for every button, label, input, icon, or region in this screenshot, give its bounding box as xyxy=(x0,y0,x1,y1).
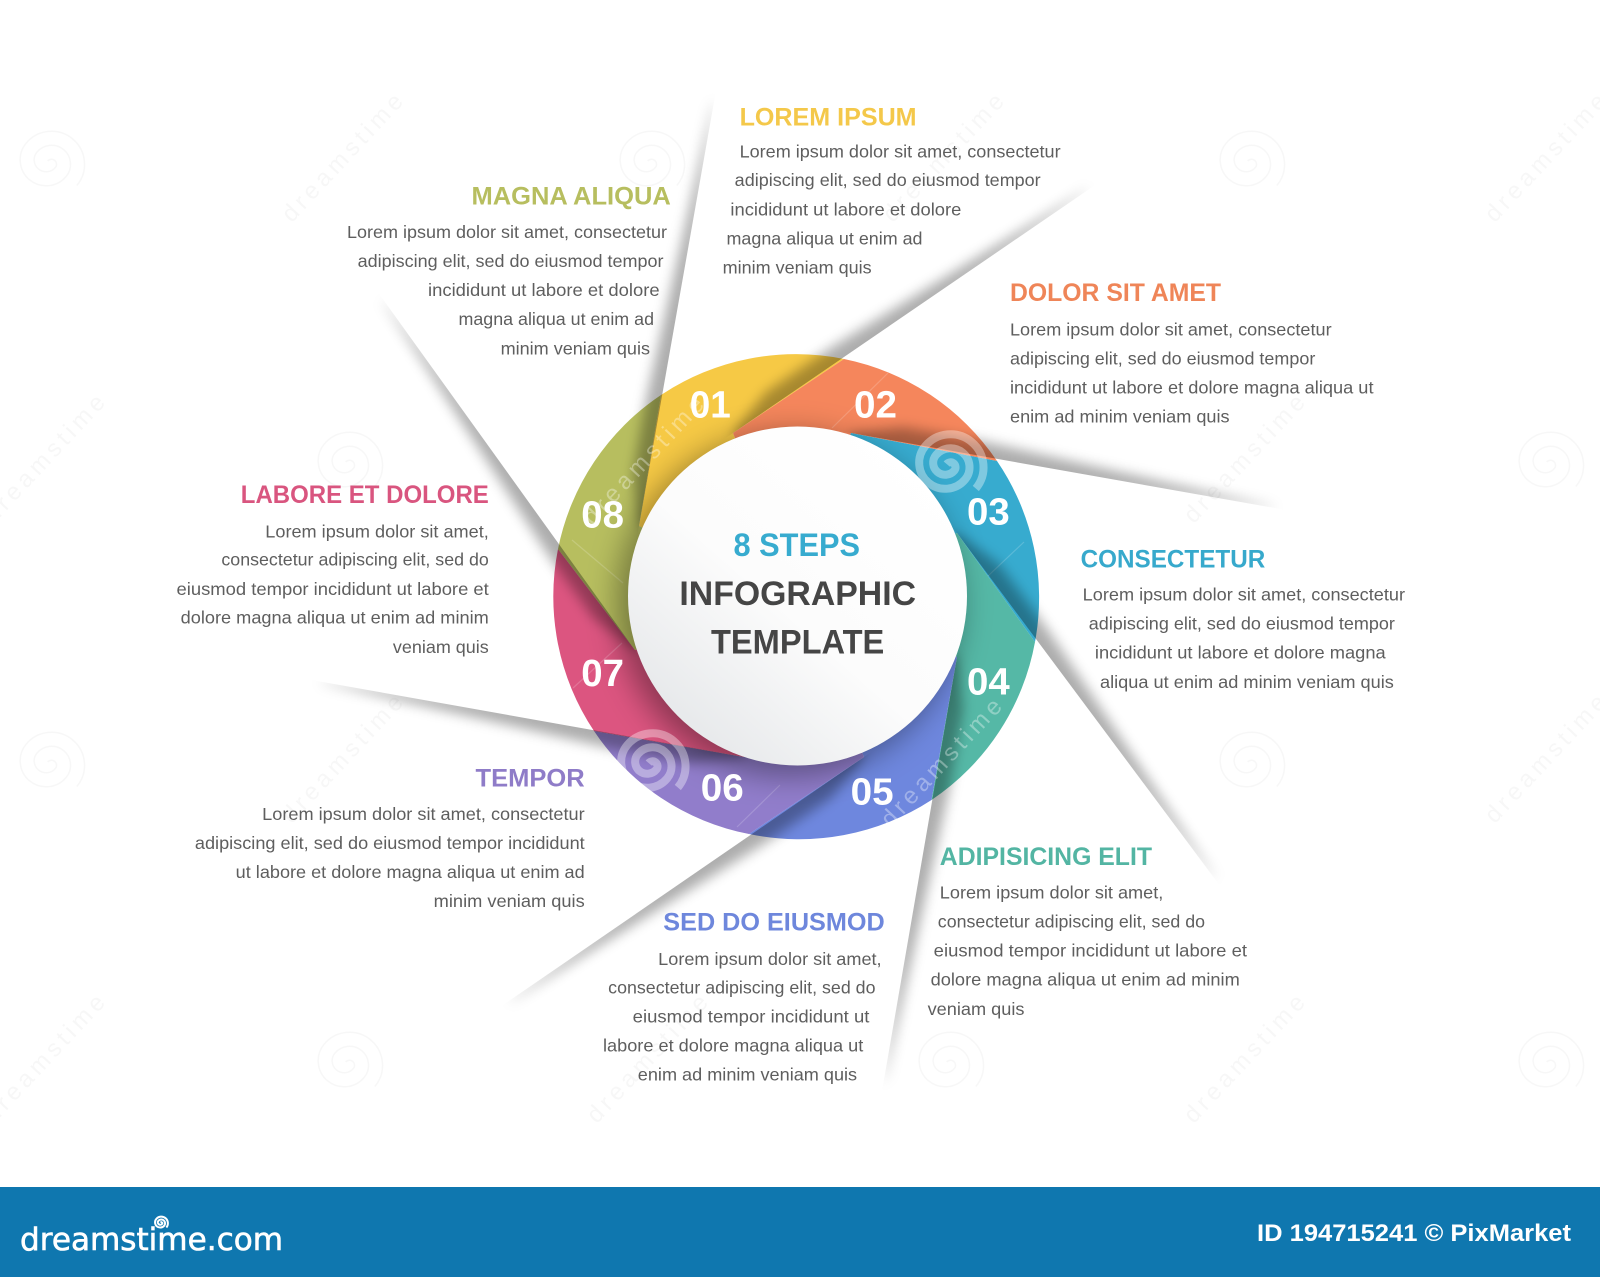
disc shadow limited to the ring xyxy=(617,432,961,776)
step numbers: 06 xyxy=(701,768,744,810)
segment 02 orange xyxy=(733,359,997,596)
text block: Tempor: Lorem ipsum dolor sit amet, consectetur xyxy=(262,804,585,824)
text block: Sed Do Eiusmod xyxy=(603,908,885,1085)
footer logo spiral xyxy=(153,1214,171,1231)
text block: Labore Et Dolore: eiusmod tempor incididunt ut labore et xyxy=(176,579,489,599)
segment 03 blue xyxy=(797,433,1039,642)
ring of eight coloured segments xyxy=(553,354,1039,839)
watermark overlay on ring: dreamstime xyxy=(577,391,710,530)
text block: Lorem Ipsum: Lorem ipsum dolor sit amet, consectetur xyxy=(740,142,1061,162)
shadow spoke 7 xyxy=(318,666,747,772)
shadow spoke 5 xyxy=(868,654,972,1083)
shadow spoke 1 xyxy=(624,100,730,529)
text block: Consectetur: Lorem ipsum dolor sit amet, consectetur xyxy=(1083,585,1405,605)
footer band xyxy=(0,1187,1600,1277)
text block: Labore Et Dolore: veniam quis xyxy=(393,637,489,657)
segment 01 yellow xyxy=(639,354,844,596)
segment 07 pink xyxy=(553,549,797,757)
text block: Sed Do Eiusmod: SED DO EIUSMOD xyxy=(663,908,885,936)
text block: Tempor: ut labore et dolore magna aliqua ut enim ad xyxy=(236,862,585,882)
centre title: TEMPLATE xyxy=(711,624,884,662)
shadow spoke 8 xyxy=(372,291,648,659)
watermark: faint spirals and diagonal text on white: dreamstime xyxy=(877,88,1010,227)
step numbers: 05 xyxy=(851,772,894,814)
text block: Adipisicing Elit: veniam quis xyxy=(928,999,1025,1019)
text block: Lorem Ipsum: magna aliqua ut enim ad xyxy=(726,228,922,248)
watermark overlay on ring xyxy=(577,391,1008,832)
text block: Dolor Sit Amet: adipiscing elit, sed do eiusmod tempor xyxy=(1010,348,1315,368)
step numbers: 04 xyxy=(967,662,1010,704)
text block: Dolor Sit Amet: enim ad minim veniam quis xyxy=(1010,407,1230,427)
footer logo text: dreamstime.com xyxy=(20,1222,283,1258)
text block: Labore Et Dolore: dolore magna aliqua ut enim ad minim xyxy=(181,608,489,628)
text block: Sed Do Eiusmod: consectetur adipiscing elit, sed do xyxy=(608,977,876,997)
text block: Labore Et Dolore: consectetur adipiscing elit, sed do xyxy=(221,549,489,569)
text block: Sed Do Eiusmod: eiusmod tempor incididunt ut xyxy=(633,1006,870,1026)
text block: Labore Et Dolore xyxy=(176,481,489,657)
shadow spoke 2 xyxy=(725,178,1097,446)
text block: Lorem Ipsum: incididunt ut labore et dolore xyxy=(730,199,961,219)
text block: Consectetur: incididunt ut labore et dolore magna xyxy=(1095,643,1386,663)
text block: Adipisicing Elit: dolore magna aliqua ut enim ad minim xyxy=(931,970,1240,990)
segment 08 olive xyxy=(558,395,797,650)
text block: Sed Do Eiusmod: labore et dolore magna aliqua ut xyxy=(603,1036,863,1056)
text block: Magna Aliqua: magna aliqua ut enim ad xyxy=(458,309,654,329)
watermark: faint spirals and diagonal text on white: dreamstime xyxy=(276,88,409,227)
watermark: faint spirals and diagonal text on white: dreamstime xyxy=(1178,389,1311,528)
text block: Dolor Sit Amet: DOLOR SIT AMET xyxy=(1010,279,1221,307)
text block: Dolor Sit Amet: incididunt ut labore et dolore magna aliqua ut xyxy=(1010,377,1374,397)
text block: Magna Aliqua: adipiscing elit, sed do eiusmod tempor xyxy=(358,251,664,271)
segment 06 purple xyxy=(594,596,864,834)
text block: Adipisicing Elit: consectetur adipiscing elit, sed do xyxy=(938,912,1205,932)
faint cross lines inside ring xyxy=(572,373,1024,827)
text block: Magna Aliqua xyxy=(347,182,671,358)
text block: Lorem Ipsum xyxy=(723,103,1061,277)
spoke shadows xyxy=(318,100,1277,1083)
text block: Dolor Sit Amet xyxy=(1010,279,1374,427)
text block: Lorem Ipsum: adipiscing elit, sed do eiusmod tempor xyxy=(735,170,1041,190)
central circle with soft shadow xyxy=(617,426,967,776)
disc xyxy=(628,426,967,766)
text block: Magna Aliqua: minim veniam quis xyxy=(501,338,650,358)
step numbers: 07 xyxy=(581,653,624,695)
text block: Tempor: TEMPOR xyxy=(476,765,585,793)
text block: Adipisicing Elit: eiusmod tempor incididunt ut labore et xyxy=(934,941,1247,961)
text block: Sed Do Eiusmod: Lorem ipsum dolor sit amet, xyxy=(658,949,882,969)
text block: Adipisicing Elit: Lorem ipsum dolor sit amet, xyxy=(940,882,1163,902)
step numbers: 08 xyxy=(581,494,624,536)
watermark: faint spirals and diagonal text on white: dreamstime xyxy=(1178,989,1311,1128)
text block: Labore Et Dolore: Lorem ipsum dolor sit amet, xyxy=(265,521,489,541)
text block: Magna Aliqua: incididunt ut labore et dolore xyxy=(428,280,660,300)
watermark: faint spirals and diagonal text on white: dreamstime xyxy=(581,989,714,1128)
text block: Lorem Ipsum: LOREM IPSUM xyxy=(740,103,917,131)
step numbers: 02 xyxy=(854,384,897,426)
centre title: 8 STEPS xyxy=(734,527,860,563)
text block: Dolor Sit Amet: Lorem ipsum dolor sit amet, consectetur xyxy=(1010,319,1332,339)
segment 04 teal xyxy=(797,533,1035,800)
text block: Labore Et Dolore: LABORE ET DOLORE xyxy=(241,481,489,509)
text block: Sed Do Eiusmod: enim ad minim veniam quis xyxy=(638,1065,857,1085)
text block: Tempor: minim veniam quis xyxy=(434,891,585,911)
text block: Adipisicing Elit xyxy=(928,843,1247,1019)
footer image id: ID 194715241 © PixMarket xyxy=(1257,1220,1571,1247)
segment 05 periwinkle xyxy=(749,596,957,839)
step numbers: 01 xyxy=(690,384,731,426)
step numbers xyxy=(581,384,1010,814)
shadow spoke 6 xyxy=(501,744,872,1013)
step numbers: 03 xyxy=(967,492,1010,534)
text block: Consectetur xyxy=(1081,546,1405,692)
text block: Consectetur: aliqua ut enim ad minim veniam quis xyxy=(1100,672,1394,692)
text block: Tempor: adipiscing elit, sed do eiusmod tempor incididunt xyxy=(195,833,585,853)
centre title: INFOGRAPHIC xyxy=(679,575,916,613)
text block: Tempor xyxy=(195,765,585,911)
text block: Magna Aliqua: MAGNA ALIQUA xyxy=(472,182,671,210)
text block: Consectetur: CONSECTETUR xyxy=(1081,546,1265,574)
text block: Adipisicing Elit: ADIPISICING ELIT xyxy=(940,843,1152,871)
centre title xyxy=(679,527,916,662)
watermark overlay on ring: dreamstime xyxy=(875,693,1008,832)
watermark: faint spirals and diagonal text on white: dreamstime xyxy=(276,689,409,828)
shadow spoke 4 xyxy=(944,524,1226,887)
text block: Consectetur: adipiscing elit, sed do eiusmod tempor xyxy=(1089,614,1395,634)
text block: Magna Aliqua: Lorem ipsum dolor sit amet, consectetur xyxy=(347,222,667,242)
text block: Lorem Ipsum: minim veniam quis xyxy=(723,257,872,277)
shadow spoke 3 xyxy=(848,418,1277,524)
